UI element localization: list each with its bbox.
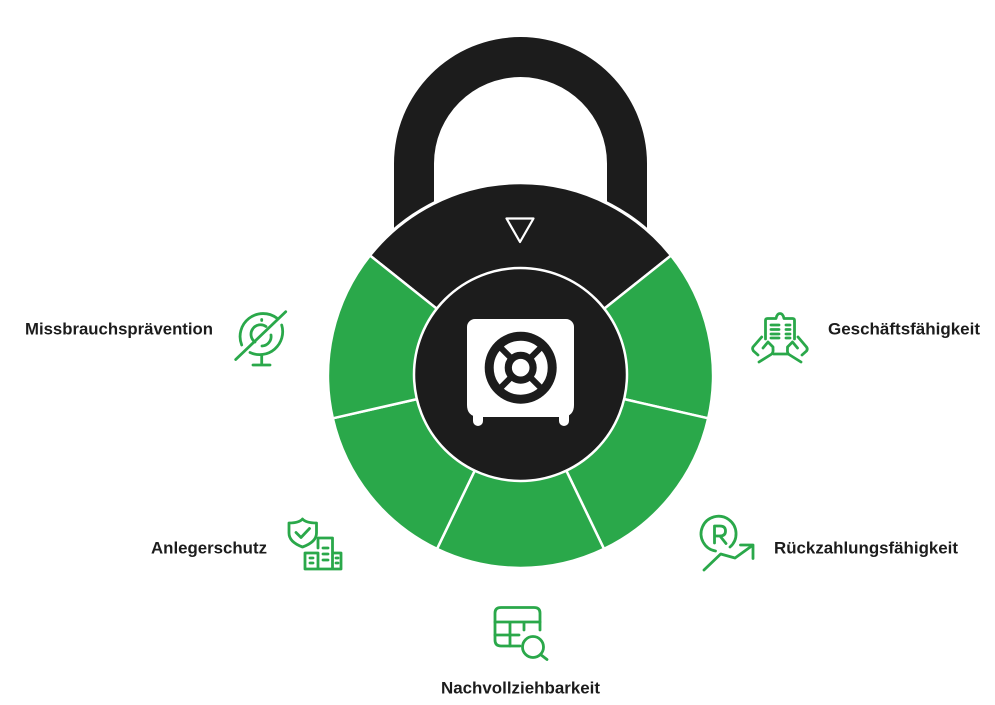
segment: Rückzahlungsfähigkeit	[520, 376, 708, 549]
segment: Missbrauchsprävention	[328, 256, 520, 418]
icon: hands holding clipboard	[753, 314, 807, 362]
dial: outer ring segments	[328, 183, 713, 568]
segment: black top	[370, 183, 671, 376]
label: Anlegerschutz: Anlegerschutz	[151, 538, 267, 558]
label: Missbrauchsprävention: Missbrauchsprävention	[25, 320, 213, 338]
safe dial	[485, 332, 557, 404]
safe body	[467, 319, 574, 417]
label: Nachvollziehbarkeit: Nachvollziehbarkeit	[441, 678, 600, 698]
shackle gap ring	[326, 181, 715, 570]
centre hub	[414, 268, 627, 481]
icon: webcam crossed out	[236, 312, 286, 365]
segment: Geschäftsfähigkeit	[520, 256, 713, 418]
icon: shield and buildings	[289, 519, 341, 569]
safe feet	[473, 412, 569, 426]
icon: table with magnifier	[495, 608, 547, 660]
segment: Anlegerschutz	[333, 376, 520, 549]
segment: Nachvollziehbarkeit	[437, 376, 604, 568]
label: Geschäftsfähigkeit: Geschäftsfähigkeit	[828, 320, 980, 338]
icon: rand currency growth arrow	[701, 516, 753, 570]
icon: safe	[467, 319, 574, 426]
padlock shackle	[394, 37, 647, 232]
label: Rückzahlungsfähigkeit: Rückzahlungsfähigkeit	[774, 538, 958, 558]
dial pointer triangle	[506, 218, 534, 242]
